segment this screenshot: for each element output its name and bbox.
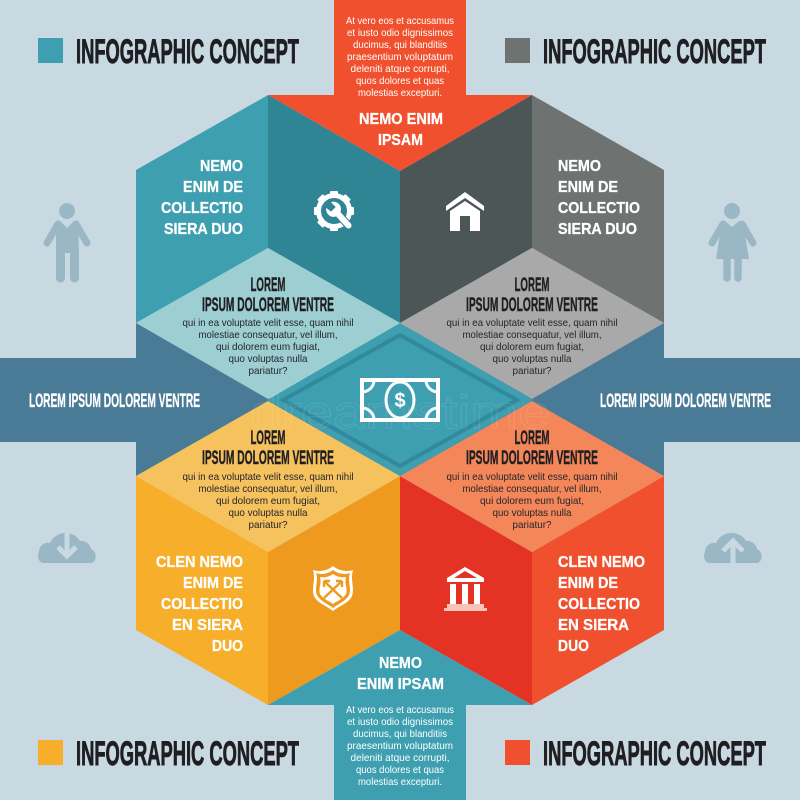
diamond: top left text: qui dolorem eum fugiat, — [216, 341, 320, 353]
icon: house — [446, 192, 484, 231]
diamond: bottom right text: quo voluptas nulla — [492, 507, 572, 519]
icon: man — [47, 203, 87, 282]
diamond: bottom left text: quo voluptas nulla — [228, 507, 308, 519]
diamond: bottom left text: LOREM — [250, 428, 286, 449]
diamond: bottom right text: qui dolorem eum fugiat, — [480, 495, 584, 507]
icon: banknote: $ — [394, 390, 406, 412]
diamond: bottom right text: pariatur? — [512, 519, 552, 531]
diamond: top right text: pariatur? — [512, 365, 552, 377]
bottom arrow: deleniti atque corrupti, — [350, 752, 450, 764]
icon: cloud upload — [704, 533, 762, 565]
diamond: bottom right text: qui in ea voluptate velit esse, quam nihil — [446, 471, 618, 483]
diamond: bottom left text — [136, 401, 400, 552]
bottom arrow: quos dolores et quas — [356, 764, 444, 776]
diamond: bottom right text: molestiae consequatur, vel illum, — [462, 483, 602, 495]
panel: top left teal: ENIM DE — [183, 179, 243, 196]
icon: cloud download — [38, 529, 96, 563]
bottom arrow: NEMO — [379, 655, 422, 672]
top arrow: molestias excepturi. — [358, 87, 442, 99]
diamond: top right text: IPSUM DOLOREM VENTRE — [466, 295, 598, 316]
panel: bottom left yellow: DUO — [212, 638, 243, 655]
diamond: bottom left text: molestiae consequatur, vel illum, — [198, 483, 338, 495]
bottom arrow: molestias excepturi. — [358, 776, 442, 788]
diamond: top left text: IPSUM DOLOREM VENTRE — [202, 295, 334, 316]
side arrows band — [0, 322, 800, 476]
icon: banknote — [362, 380, 438, 420]
heading: top left — [38, 33, 299, 71]
diamond: top right text: molestiae consequatur, vel illum, — [462, 329, 602, 341]
diamond: bottom right text: LOREM — [514, 428, 550, 449]
diamond: bottom left text: IPSUM DOLOREM VENTRE — [202, 448, 334, 469]
top arrow: et iusto odio dignissimos — [347, 27, 453, 39]
top arrow: deleniti atque corrupti, — [350, 63, 450, 75]
panel: top right grey: NEMO — [558, 158, 601, 175]
diamond: top right text: LOREM — [514, 275, 550, 296]
top arrow: IPSAM — [378, 132, 423, 149]
diamond: top left text: pariatur? — [248, 365, 288, 377]
center diamond with money icon — [267, 323, 533, 476]
panel: bottom left yellow: ENIM DE — [183, 575, 243, 592]
top arrow: NEMO ENIM — [359, 111, 443, 128]
top arrow: At vero eos et accusamus — [346, 15, 454, 27]
panel: bottom right red: ENIM DE — [558, 575, 618, 592]
diamond: bottom left text: qui in ea voluptate velit esse, quam nihil — [182, 471, 354, 483]
diamond: bottom left text: qui dolorem eum fugiat, — [216, 495, 320, 507]
top arrow: ducimus, qui blanditiis — [353, 39, 447, 51]
panel: top right grey: ENIM DE — [558, 179, 618, 196]
diamond: top left text: molestiae consequatur, vel illum, — [198, 329, 338, 341]
icon: woman — [712, 203, 753, 278]
icon: gear and wrench — [314, 191, 354, 231]
icon: bank building — [444, 567, 487, 611]
panel: top right grey: SIERA DUO — [558, 221, 637, 238]
bottom arrow: et iusto odio dignissimos — [347, 716, 453, 728]
panel: bottom left yellow: CLEN NEMO — [156, 554, 243, 571]
diamond: top left text: qui in ea voluptate velit esse, quam nihil — [182, 317, 354, 329]
top arrow — [268, 0, 532, 171]
diamond: top right text — [400, 248, 664, 399]
left band label: LOREM IPSUM DOLOREM VENTRE — [29, 391, 200, 412]
panel: top left teal: NEMO — [200, 158, 243, 175]
bottom arrow: At vero eos et accusamus — [346, 704, 454, 716]
panel: bottom left yellow — [136, 476, 400, 705]
panel: bottom left yellow: COLLECTIO — [161, 596, 243, 613]
diamond: top left text: LOREM — [250, 275, 286, 296]
bottom arrow: ducimus, qui blanditiis — [353, 728, 447, 740]
panel: top right grey — [400, 95, 664, 323]
heading: bottom left — [38, 735, 299, 773]
icon: shield with arrows — [313, 566, 353, 611]
bottom arrow: praesentium voluptatum — [347, 740, 453, 752]
bottom arrow — [268, 630, 532, 800]
heading: bottom left: INFOGRAPHIC CONCEPT — [76, 735, 299, 773]
diamond: bottom right text: IPSUM DOLOREM VENTRE — [466, 448, 598, 469]
diamond: top left text — [136, 248, 400, 399]
diamond: top right text: quo voluptas nulla — [492, 353, 572, 365]
panel: top left teal — [136, 95, 400, 323]
diamond: bottom right text — [400, 401, 664, 552]
watermark: dreamstime — [250, 386, 550, 438]
diamond: top right text: qui in ea voluptate velit esse, quam nihil — [446, 317, 618, 329]
panel: bottom right red: DUO — [558, 638, 589, 655]
panel: top left teal: COLLECTIO — [161, 200, 243, 217]
bottom arrow: ENIM IPSAM — [357, 676, 444, 693]
panel: bottom left yellow: EN SIERA — [172, 617, 243, 634]
panel: bottom right red: CLEN NEMO — [558, 554, 645, 571]
diamond: bottom left text: pariatur? — [248, 519, 288, 531]
panel: bottom right red: COLLECTIO — [558, 596, 640, 613]
panel: top right grey: COLLECTIO — [558, 200, 640, 217]
panel: bottom right red — [400, 476, 664, 705]
panel: bottom right red: EN SIERA — [558, 617, 629, 634]
heading: top left: INFOGRAPHIC CONCEPT — [76, 33, 299, 71]
diamond: top left text: quo voluptas nulla — [228, 353, 308, 365]
panel: top left teal: SIERA DUO — [164, 221, 243, 238]
top arrow: quos dolores et quas — [356, 75, 444, 87]
diamond: top right text: qui dolorem eum fugiat, — [480, 341, 584, 353]
top arrow: praesentium voluptatum — [347, 51, 453, 63]
